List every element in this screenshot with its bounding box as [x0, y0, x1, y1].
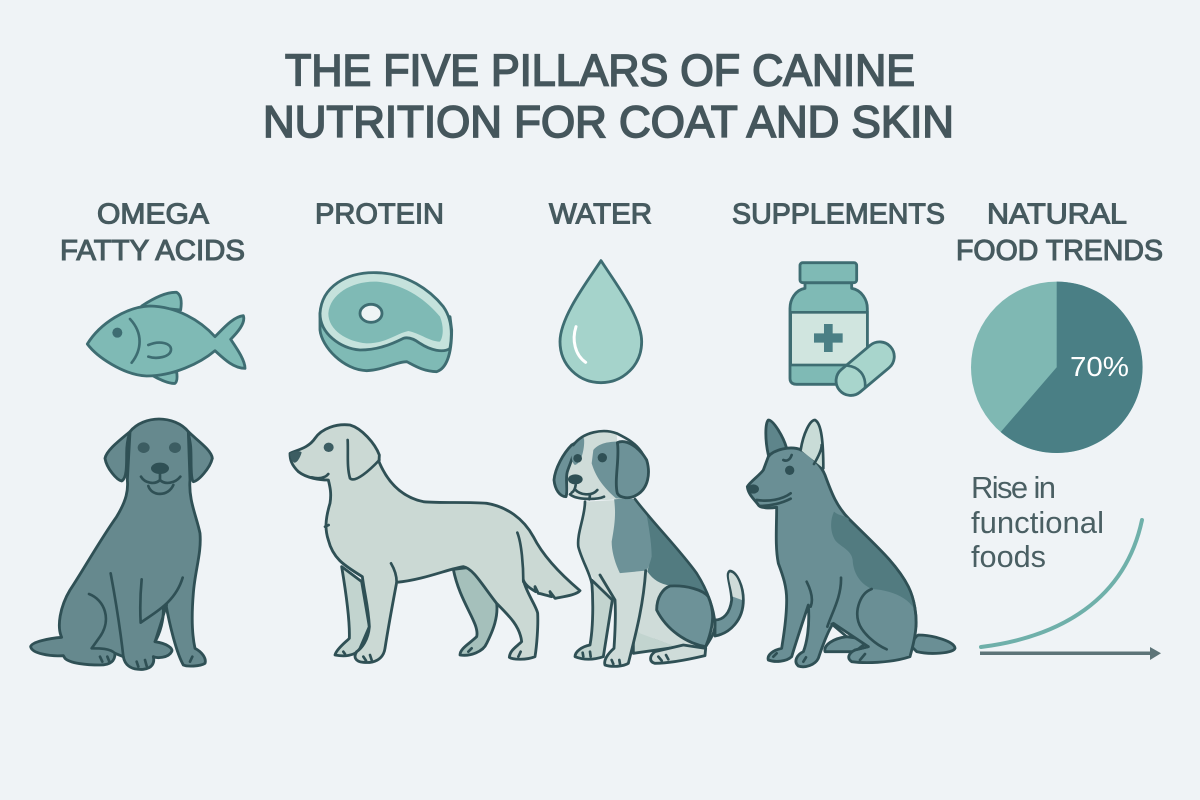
- dog 1: dark sitting labrador: [31, 419, 212, 669]
- chart: pie 70%: [971, 282, 1143, 453]
- chart: pie 70%: 70%: [1070, 351, 1129, 382]
- text: rise in functional foods: [971, 470, 1104, 574]
- heading: natural food trends: FOOD TRENDS: [956, 235, 1163, 267]
- icon: water drop: [560, 261, 642, 383]
- text: rise in functional foods: Rise in: [971, 470, 1056, 505]
- heading: water: WATER: [549, 198, 652, 230]
- text: rise in functional foods: foods: [971, 539, 1046, 574]
- icon: supplement bottle and capsule: [790, 263, 900, 401]
- heading: natural food trends: NATURAL: [987, 198, 1127, 230]
- heading: protein: PROTEIN: [315, 198, 444, 230]
- title: NUTRITION FOR COAT AND SKIN: [263, 98, 954, 147]
- text: rise in functional foods: functional: [971, 505, 1104, 540]
- dog 2: light standing retriever: [290, 425, 580, 662]
- dog 3: spotted beagle: [554, 431, 743, 666]
- icon: steak: [320, 273, 452, 372]
- heading: natural food trends: [956, 198, 1163, 267]
- heading: omega fatty acids: [60, 198, 245, 267]
- chart: rising trend curve with arrow: [980, 520, 1161, 660]
- heading: omega fatty acids: FATTY ACIDS: [60, 235, 245, 267]
- heading: supplements: SUPPLEMENTS: [732, 198, 945, 230]
- heading: omega fatty acids: OMEGA: [97, 198, 209, 230]
- title: [263, 46, 954, 147]
- icon: fish: [87, 292, 245, 383]
- title: THE FIVE PILLARS OF CANINE: [285, 46, 915, 96]
- dog 4: shepherd with pointed ears: [747, 420, 955, 667]
